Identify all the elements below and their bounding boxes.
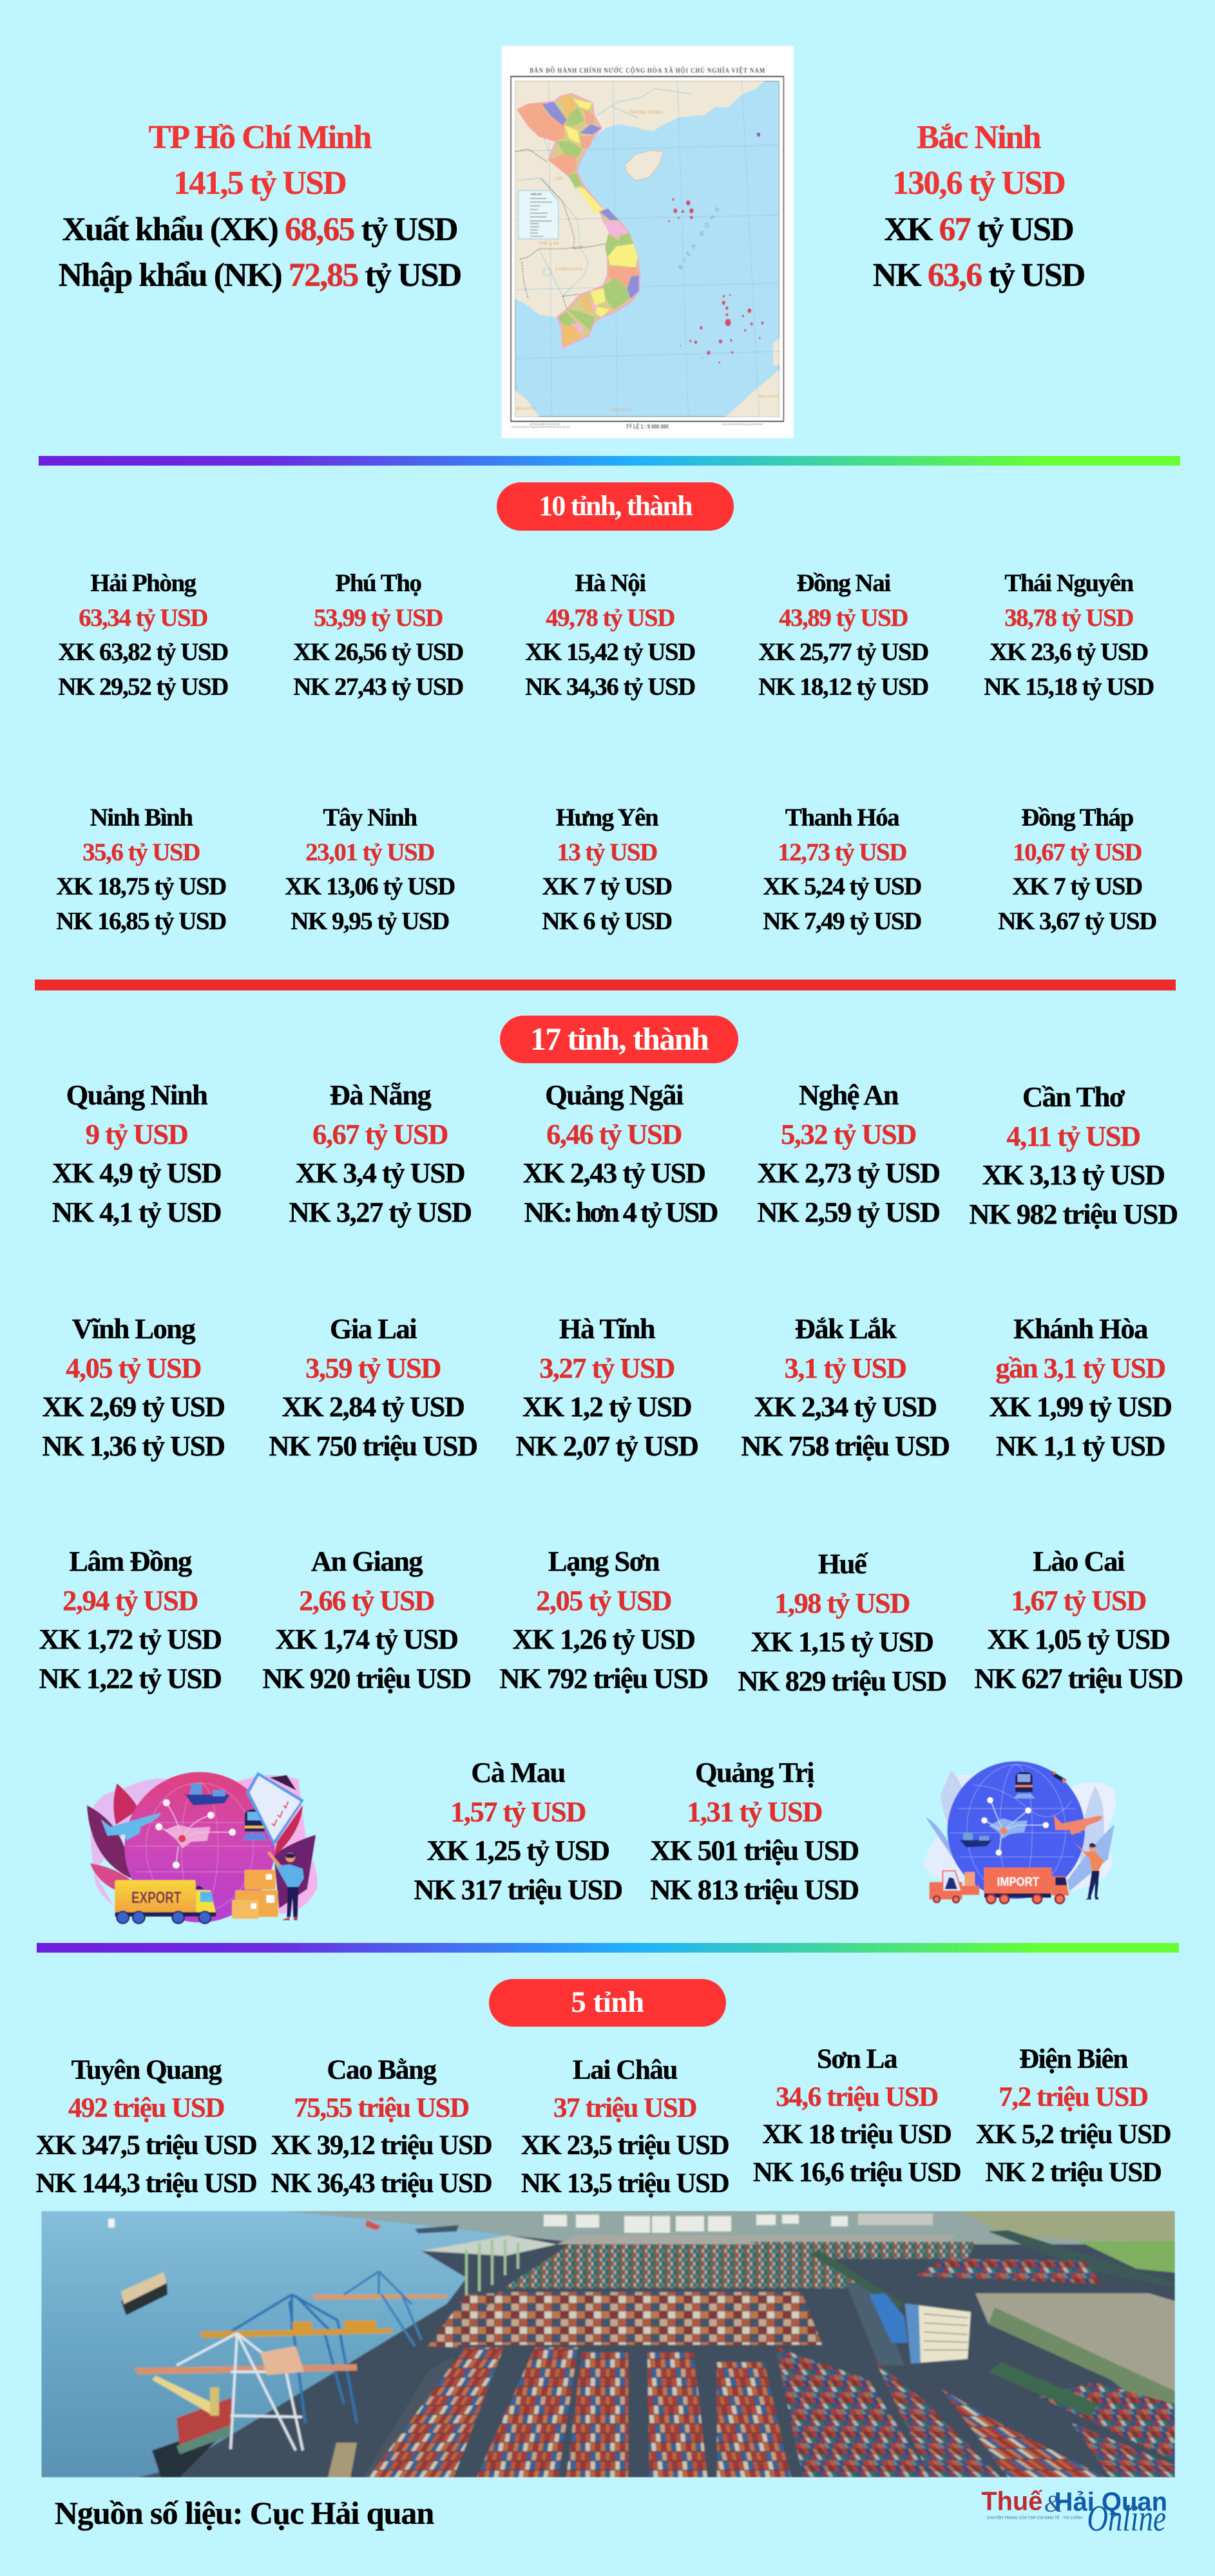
stat: Cần Thơ: NK 982 triệu USD (969, 1198, 1178, 1230)
green field (962, 2211, 1175, 2243)
stat: Lào Cai: XK 1,05 tỷ USD (987, 1623, 1170, 1655)
stat: Hà Nội: Hà Nội (575, 569, 646, 597)
stat: Huế (738, 1544, 946, 1701)
stat: Ninh Bình: Ninh Bình (90, 804, 192, 831)
stat: Gia Lai: 3,59 tỷ USD (305, 1352, 441, 1384)
stat: Lai Châu: XK 23,5 triệu USD (521, 2130, 729, 2161)
stat: Lai Châu: NK 13,5 triệu USD (521, 2168, 729, 2199)
map of Vietnam: LÀO (555, 175, 564, 181)
stat: Phú Thọ: NK 27,43 tỷ USD (293, 672, 463, 701)
stat: Quảng Ninh: 9 tỷ USD (86, 1118, 187, 1150)
stat block: Bắc Ninh: 130,6 tỷ USD (892, 165, 1065, 202)
stat: Đồng Nai: Đồng Nai (796, 569, 890, 597)
stat: Đồng Nai (758, 569, 928, 701)
stat: Sơn La: Sơn La (817, 2044, 897, 2074)
stat: Quảng Ngãi: 6,46 tỷ USD (546, 1118, 682, 1150)
stat: Thái Nguyên: XK 23,6 tỷ USD (990, 638, 1148, 666)
logo: Thuế & Hải Quan Online: Online (1087, 2499, 1166, 2539)
moving ship (121, 2280, 167, 2315)
heading pill: 17 tỉnh, thành: 17 tỉnh, thành (530, 1021, 708, 1057)
stat: Huế: Huế (818, 1548, 866, 1580)
stat: Sơn La: XK 18 triệu USD (762, 2119, 952, 2150)
train (245, 1809, 265, 1832)
stat: Điện Biên: 7,2 triệu USD (999, 2082, 1148, 2112)
map of Vietnam: BẢN ĐỒ HÀNH CHÍNH NƯỚC CỘNG HÒA XÃ HỘI CHỦ NGHĨA VIỆT NAM (530, 66, 765, 75)
stat: Hải Phòng: XK 63,82 tỷ USD (58, 638, 228, 666)
stat: Đồng Nai: NK 18,12 tỷ USD (758, 672, 928, 701)
stat: Hà Tĩnh (515, 1312, 698, 1462)
container blocks (504, 2244, 872, 2288)
stat: Đà Nẵng: NK 3,27 tỷ USD (289, 1196, 472, 1228)
stat: Thanh Hóa (763, 804, 921, 935)
logo: Thuế & Hải Quan Online: & (1044, 2491, 1063, 2517)
stat: Lâm Đồng: XK 1,72 tỷ USD (39, 1623, 222, 1655)
stat: Quảng Trị: 1,31 tỷ USD (687, 1795, 822, 1828)
stat block: TP Hồ Chí Minh: 141,5 tỷ USD (173, 165, 346, 202)
panel: 17 tỉnh, thành (39, 1016, 1183, 1924)
stat: Quảng Ninh: Quảng Ninh (66, 1079, 207, 1111)
train (1015, 1772, 1033, 1792)
stat: Quảng Trị: XK 501 triệu USD (650, 1834, 859, 1866)
stat: Lào Cai: Lào Cai (1033, 1545, 1124, 1577)
blue roof (869, 2293, 908, 2343)
stat: Đồng Tháp: Đồng Tháp (1021, 804, 1133, 831)
stat: Khánh Hòa: Khánh Hòa (1013, 1312, 1147, 1345)
stat: Cao Bằng: 75,55 triệu USD (294, 2093, 469, 2123)
stat: Gia Lai: NK 750 triệu USD (269, 1430, 477, 1462)
logo: Thuế & Hải Quan Online: CHUYÊN TRANG CỦA TẠP CHÍ KINH TẾ - TÀI CHÍNH (987, 2514, 1082, 2520)
stat block: Bắc Ninh (873, 119, 1084, 294)
stat: Cần Thơ: XK 3,13 tỷ USD (982, 1159, 1165, 1191)
stat: Khánh Hòa: NK 1,1 tỷ USD (996, 1430, 1165, 1462)
stat block: TP Hồ Chí Minh: Xuất khẩu (XK) 68,65 tỷ USD (62, 211, 457, 248)
stat: Phú Thọ (293, 569, 463, 701)
stat: Đồng Nai: XK 25,77 tỷ USD (758, 638, 928, 666)
stat: Phú Thọ: Phú Thọ (336, 569, 421, 597)
stat: Tuyên Quang: 492 triệu USD (68, 2093, 224, 2123)
road / trees (811, 2249, 904, 2309)
stat: Quảng Ngãi: Quảng Ngãi (545, 1079, 683, 1111)
stat: Cà Mau: NK 317 triệu USD (414, 1873, 622, 1906)
stat: Nghệ An: 5,32 tỷ USD (781, 1118, 916, 1150)
stat: Ninh Bình: XK 18,75 tỷ USD (56, 873, 226, 900)
ship (185, 1795, 230, 1805)
top storage tanks (544, 2213, 933, 2233)
stat: Lâm Đồng: 2,94 tỷ USD (62, 1584, 198, 1616)
person (269, 1852, 304, 1887)
stat: Nghệ An: XK 2,73 tỷ USD (757, 1157, 940, 1189)
stat: Đà Nẵng: XK 3,4 tỷ USD (296, 1157, 464, 1189)
stat: Phú Thọ: 53,99 tỷ USD (314, 604, 443, 631)
stat: Đồng Tháp (998, 804, 1156, 935)
stat: Hà Tĩnh: NK 2,07 tỷ USD (515, 1430, 698, 1462)
stat: Lai Châu: Lai Châu (573, 2055, 677, 2085)
map of Vietnam: CAMPUCHIA (555, 267, 583, 272)
stat: Hà Nội: NK 34,36 tỷ USD (525, 672, 695, 701)
map of Vietnam: BỘ NÔNG NGHIỆP VÀ MÔI TRƯỜNG (530, 422, 560, 426)
stat: Thanh Hóa: 12,73 tỷ USD (778, 838, 906, 866)
stat: Hà Tĩnh: XK 1,2 tỷ USD (522, 1390, 691, 1423)
stat: Đồng Tháp: 10,67 tỷ USD (1013, 838, 1142, 866)
stat: Vĩnh Long: NK 1,36 tỷ USD (42, 1430, 225, 1462)
stat: Quảng Ngãi: NK: hơn 4 tỷ USD (524, 1196, 716, 1228)
stat: Tây Ninh: 23,01 tỷ USD (305, 838, 434, 866)
heading pill: 10 tỉnh, thành (497, 482, 734, 531)
stat: Thái Nguyên (984, 569, 1154, 701)
stat: Điện Biên: NK 2 triệu USD (985, 2157, 1162, 2188)
stat: Ninh Bình: NK 16,85 tỷ USD (56, 907, 226, 935)
stat: Cao Bằng: NK 36,43 triệu USD (271, 2168, 492, 2199)
stat: Gia Lai: XK 2,84 tỷ USD (282, 1390, 464, 1423)
stat: Lâm Đồng: NK 1,22 tỷ USD (39, 1662, 222, 1694)
stat: Lạng Sơn: XK 1,26 tỷ USD (512, 1623, 695, 1655)
stat: Đắk Lắk: 3,1 tỷ USD (785, 1352, 906, 1384)
stat: Gia Lai: Gia Lai (330, 1312, 416, 1345)
stat: Hưng Yên: XK 7 tỷ USD (542, 873, 672, 900)
stat: Hà Nội: XK 15,42 tỷ USD (525, 638, 695, 666)
stat block: Bắc Ninh: Bắc Ninh (917, 119, 1040, 156)
stat: Đồng Nai: 43,89 tỷ USD (779, 604, 908, 631)
stat: Sơn La: NK 16,6 triệu USD (753, 2157, 961, 2188)
stat: Quảng Trị: Quảng Trị (695, 1756, 814, 1788)
stat: Vĩnh Long: 4,05 tỷ USD (66, 1352, 201, 1384)
illustration: import: IMPORT (997, 1875, 1039, 1889)
stat: Tuyên Quang: XK 347,5 triệu USD (36, 2130, 256, 2161)
truck (984, 1868, 1052, 1894)
stat: Cần Thơ: Cần Thơ (1022, 1081, 1124, 1113)
plane (101, 1813, 160, 1840)
panel: 5 tỉnh (0, 1971, 1215, 2202)
stat: Tuyên Quang: NK 144,3 triệu USD (36, 2168, 256, 2199)
stat: An Giang: 2,66 tỷ USD (299, 1584, 434, 1616)
stat: Vĩnh Long (42, 1312, 225, 1462)
stat: Điện Biên (976, 2041, 1171, 2192)
map of Vietnam (501, 46, 794, 439)
stat: Đồng Tháp: XK 7 tỷ USD (1012, 873, 1142, 900)
stat: Quảng Ninh: NK 4,1 tỷ USD (52, 1196, 221, 1228)
person (1074, 1842, 1104, 1871)
stat: Lào Cai: NK 627 triệu USD (974, 1662, 1183, 1694)
stat: Cà Mau: Cà Mau (471, 1756, 565, 1788)
map of Vietnam: TỶ LỆ 1 : 9 000 000 (626, 422, 669, 430)
stat: Lào Cai (974, 1542, 1183, 1698)
map of Vietnam: CHÚ GIẢI (530, 191, 542, 196)
stat: Thái Nguyên: 38,78 tỷ USD (1004, 604, 1133, 631)
truck (115, 1880, 196, 1912)
stat: Đắk Lắk: XK 2,34 tỷ USD (754, 1390, 937, 1423)
stat: Vĩnh Long: XK 2,69 tỷ USD (42, 1390, 225, 1423)
logo: Thuế & Hải Quan Online: Thuế (981, 2486, 1043, 2515)
green cranes (466, 2240, 518, 2301)
stat: Cao Bằng: Cao Bằng (327, 2055, 436, 2085)
stat: Tây Ninh: NK 9,95 tỷ USD (291, 907, 449, 935)
stat block: TP Hồ Chí Minh (59, 119, 461, 294)
ship crane (152, 2376, 215, 2414)
stat: Quảng Ngãi: XK 2,43 tỷ USD (522, 1157, 705, 1189)
stat: Quảng Trị: NK 813 triệu USD (650, 1873, 859, 1906)
stat: Hưng Yên: 13 tỷ USD (557, 838, 657, 866)
clipboard (246, 1772, 304, 1846)
stat: Quảng Ninh (52, 1079, 221, 1228)
heading pill: 5 tỉnh: 5 tỉnh (571, 1985, 644, 2019)
stat: Đắk Lắk: Đắk Lắk (795, 1312, 895, 1345)
grey trucks on the quay (328, 2443, 357, 2477)
stat: Huế: XK 1,15 tỷ USD (751, 1625, 933, 1658)
stat block: TP Hồ Chí Minh: Nhập khẩu (NK) 72,85 tỷ USD (59, 257, 461, 294)
stat: Lai Châu: 37 triệu USD (553, 2093, 696, 2123)
photo: container port (41, 2211, 1175, 2477)
stat: Lạng Sơn (499, 1542, 708, 1698)
stat: Nghệ An (757, 1079, 940, 1228)
stat: An Giang (262, 1542, 471, 1698)
heading pill: 17 tỉnh, thành (500, 1016, 738, 1063)
stat: Đà Nẵng: Đà Nẵng (330, 1079, 430, 1111)
stat: Phú Thọ: XK 26,56 tỷ USD (293, 638, 463, 666)
stat: Huế: 1,98 tỷ USD (774, 1587, 910, 1619)
stat: Điện Biên: XK 5,2 triệu USD (976, 2119, 1171, 2150)
stat: Khánh Hòa (989, 1309, 1172, 1466)
container ship (152, 2422, 234, 2477)
stat: Cao Bằng: XK 39,12 triệu USD (271, 2130, 492, 2161)
stat: Lâm Đồng (39, 1542, 222, 1698)
stat: Cà Mau: XK 1,25 tỷ USD (426, 1834, 609, 1866)
stat: Lạng Sơn: NK 792 triệu USD (499, 1662, 708, 1694)
stat: Quảng Ninh: XK 4,9 tỷ USD (52, 1157, 221, 1189)
boxes (244, 1870, 276, 1889)
heading pill: 5 tỉnh (489, 1979, 726, 2027)
stat: Hải Phòng: NK 29,52 tỷ USD (58, 672, 228, 701)
stat: Đắk Lắk (741, 1312, 950, 1462)
illustration: export: EXPORT (131, 1889, 181, 1907)
stat: Cao Bằng (271, 2052, 492, 2203)
stat: Sơn La (753, 2041, 961, 2192)
stat: An Giang: An Giang (311, 1545, 422, 1577)
road light (557, 2235, 956, 2244)
stat block: Bắc Ninh: XK 67 tỷ USD (884, 211, 1073, 248)
stat: Đồng Tháp: NK 3,67 tỷ USD (998, 907, 1156, 935)
stat: An Giang: XK 1,74 tỷ USD (275, 1623, 458, 1655)
forklift (930, 1882, 962, 1899)
stat: Ninh Bình (56, 804, 226, 935)
stat: Lạng Sơn: 2,05 tỷ USD (536, 1584, 671, 1616)
stat: Đà Nẵng: 6,67 tỷ USD (312, 1118, 448, 1150)
stat: Tuyên Quang: Tuyên Quang (72, 2055, 221, 2085)
stat: Lào Cai: 1,67 tỷ USD (1011, 1584, 1146, 1616)
map of Vietnam: Các tên chính thức thể hiện theo ranh giới hành chính (722, 423, 763, 426)
stat block: TP Hồ Chí Minh: TP Hồ Chí Minh (149, 119, 370, 156)
panel: 10 tỉnh, thành (56, 482, 1156, 935)
stat: Cà Mau: 1,57 tỷ USD (450, 1795, 586, 1828)
stat block: Bắc Ninh: NK 63,6 tỷ USD (873, 257, 1084, 294)
stat: Nghệ An: NK 2,59 tỷ USD (757, 1196, 940, 1228)
map of Vietnam: INDONESIA (611, 408, 633, 413)
stat: Hà Tĩnh: 3,27 tỷ USD (539, 1352, 674, 1384)
stat: Hưng Yên (542, 804, 672, 935)
map of Vietnam: MALAIXIA (516, 407, 536, 412)
stat: Sơn La: 34,6 triệu USD (776, 2082, 938, 2112)
stat: Hà Tĩnh: Hà Tĩnh (559, 1312, 655, 1345)
stat: Hải Phòng (58, 569, 228, 701)
stat: Tuyên Quang (36, 2052, 256, 2203)
stat: Lâm Đồng: Lâm Đồng (69, 1545, 191, 1577)
map of Vietnam: Cục Đo đạc, Bản đồ và Thông tin địa lý Việt Nam thành lập tháng 6 năm 2025 (511, 426, 570, 428)
stat: Nghệ An: Nghệ An (799, 1079, 898, 1111)
map of Vietnam: THÁI LAN (538, 240, 559, 246)
stat: An Giang: NK 920 triệu USD (262, 1662, 471, 1694)
stat: Lạng Sơn: Lạng Sơn (548, 1545, 659, 1577)
stat: Cà Mau (414, 1753, 622, 1909)
stat: Thái Nguyên: Thái Nguyên (1004, 569, 1133, 597)
stat: Cần Thơ: 4,11 tỷ USD (1006, 1120, 1140, 1152)
heading pill: 10 tỉnh, thành: 10 tỉnh, thành (539, 490, 692, 522)
stat: Tây Ninh: Tây Ninh (323, 804, 417, 831)
stat: Hải Phòng: 63,34 tỷ USD (79, 604, 207, 631)
panel: top two leaders with map (59, 46, 1084, 439)
map of Vietnam: MALAIXIA (759, 395, 779, 399)
logo: Thuế & Hải Quan Online: Hải Quan (1055, 2487, 1167, 2517)
stat: Khánh Hòa: XK 1,99 tỷ USD (989, 1390, 1172, 1423)
stat: Thái Nguyên: NK 15,18 tỷ USD (984, 672, 1154, 701)
stat: Thanh Hóa: XK 5,24 tỷ USD (763, 873, 921, 900)
logo: Thuế & Hải Quan Online (953, 2473, 1198, 2557)
stat: Tây Ninh (285, 804, 455, 935)
stat: Gia Lai (269, 1312, 477, 1462)
stat: Tây Ninh: XK 13,06 tỷ USD (285, 873, 455, 900)
stat: Lai Châu (521, 2052, 729, 2203)
stat: Huế: NK 829 triệu USD (738, 1665, 946, 1697)
stat: Vĩnh Long: Vĩnh Long (72, 1312, 195, 1345)
stat: Ninh Bình: 35,6 tỷ USD (82, 838, 200, 866)
stat: Quảng Ngãi (522, 1079, 718, 1228)
stat: Đắk Lắk: NK 758 triệu USD (741, 1430, 950, 1462)
stat: Hưng Yên: NK 6 tỷ USD (542, 907, 672, 935)
stat: Hưng Yên: Hưng Yên (556, 804, 658, 831)
office building (905, 2304, 971, 2363)
map of Vietnam: TRUNG QUỐC (629, 108, 664, 115)
stat: Đà Nẵng (289, 1079, 472, 1228)
source note: Nguồn số liệu: Cục Hải quan (55, 2495, 434, 2531)
stat: Cần Thơ (969, 1081, 1178, 1230)
blue crane (228, 2295, 357, 2423)
stat: Thanh Hóa: NK 7,49 tỷ USD (763, 907, 921, 935)
stat: Hà Nội: 49,78 tỷ USD (546, 604, 674, 631)
stat: Quảng Trị (650, 1753, 859, 1909)
stat: Khánh Hòa: gần 3,1 tỷ USD (995, 1352, 1165, 1384)
stat: Thanh Hóa: Thanh Hóa (785, 804, 899, 831)
illustration: import (902, 1752, 1160, 1926)
ship (960, 1840, 991, 1847)
map of Vietnam: BIỂN ĐÔNG (676, 201, 723, 271)
dirt field (975, 2293, 1175, 2430)
stat: Điện Biên: Điện Biên (1019, 2044, 1127, 2074)
plane (1054, 1815, 1102, 1835)
stat: Hà Nội (525, 569, 695, 701)
stat: Hải Phòng: Hải Phòng (90, 569, 196, 597)
far ships (365, 2220, 381, 2230)
white crane (135, 2364, 357, 2374)
illustration: export (64, 1752, 335, 1945)
